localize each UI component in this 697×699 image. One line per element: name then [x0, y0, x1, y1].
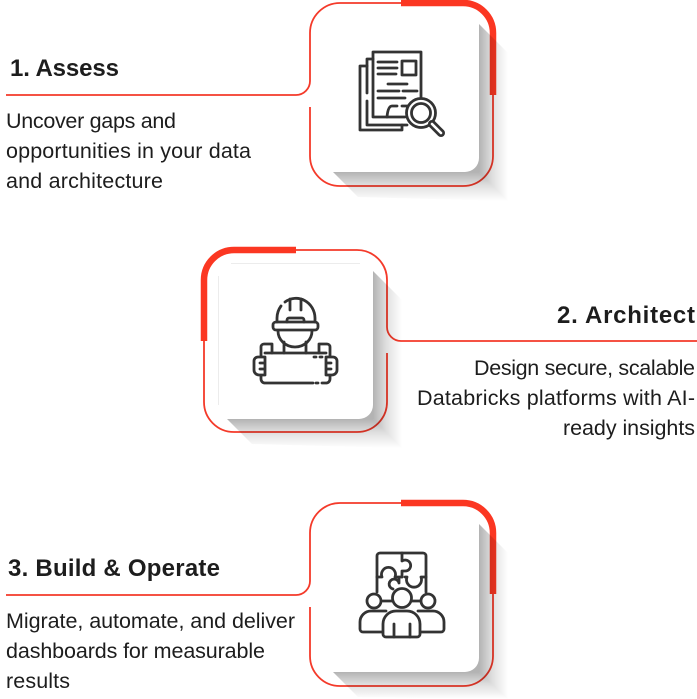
description 2: ready insights [563, 416, 695, 440]
step 2: architect [204, 250, 697, 448]
description 3: results [6, 669, 70, 693]
description 1: and architecture [6, 169, 163, 193]
heading 2: 2. Architect [557, 302, 695, 329]
red accent corner 3 [401, 503, 493, 594]
icon: team with puzzle [360, 553, 444, 637]
description 2: Design secure, scalable [474, 356, 695, 380]
white card 3 [318, 516, 479, 672]
card shadow 1 [333, 24, 508, 201]
white card 2 [218, 263, 373, 419]
icon: document with magnifier [360, 52, 441, 133]
description 3 [6, 609, 295, 693]
description 2 [417, 356, 695, 440]
red accent corner 2 [204, 250, 296, 341]
heading 1: 1. Assess [10, 55, 119, 82]
step 3: build and operate [6, 503, 508, 699]
icon: engineer holding a plan [254, 298, 337, 383]
faint card edges [218, 264, 360, 405]
white card 1 [318, 16, 479, 172]
red accent corner 1 [401, 3, 493, 95]
description 1: opportunities in your data [6, 139, 251, 163]
heading 3: 3. Build & Operate [8, 555, 220, 582]
card outline and connector 3 [6, 503, 493, 686]
description 1: Uncover gaps and [6, 109, 176, 133]
description 3: dashboards for measurable [6, 639, 265, 663]
description 1 [6, 109, 251, 193]
description 3: Migrate, automate, and deliver [6, 609, 295, 633]
description 2: Databricks platforms with AI- [417, 386, 695, 410]
card shadow 3 [333, 524, 508, 699]
card shadow 2 [227, 271, 402, 448]
card outline and connector 2 [204, 250, 697, 432]
card outline and connector 1 [6, 3, 493, 186]
step 1: assess [6, 3, 508, 201]
